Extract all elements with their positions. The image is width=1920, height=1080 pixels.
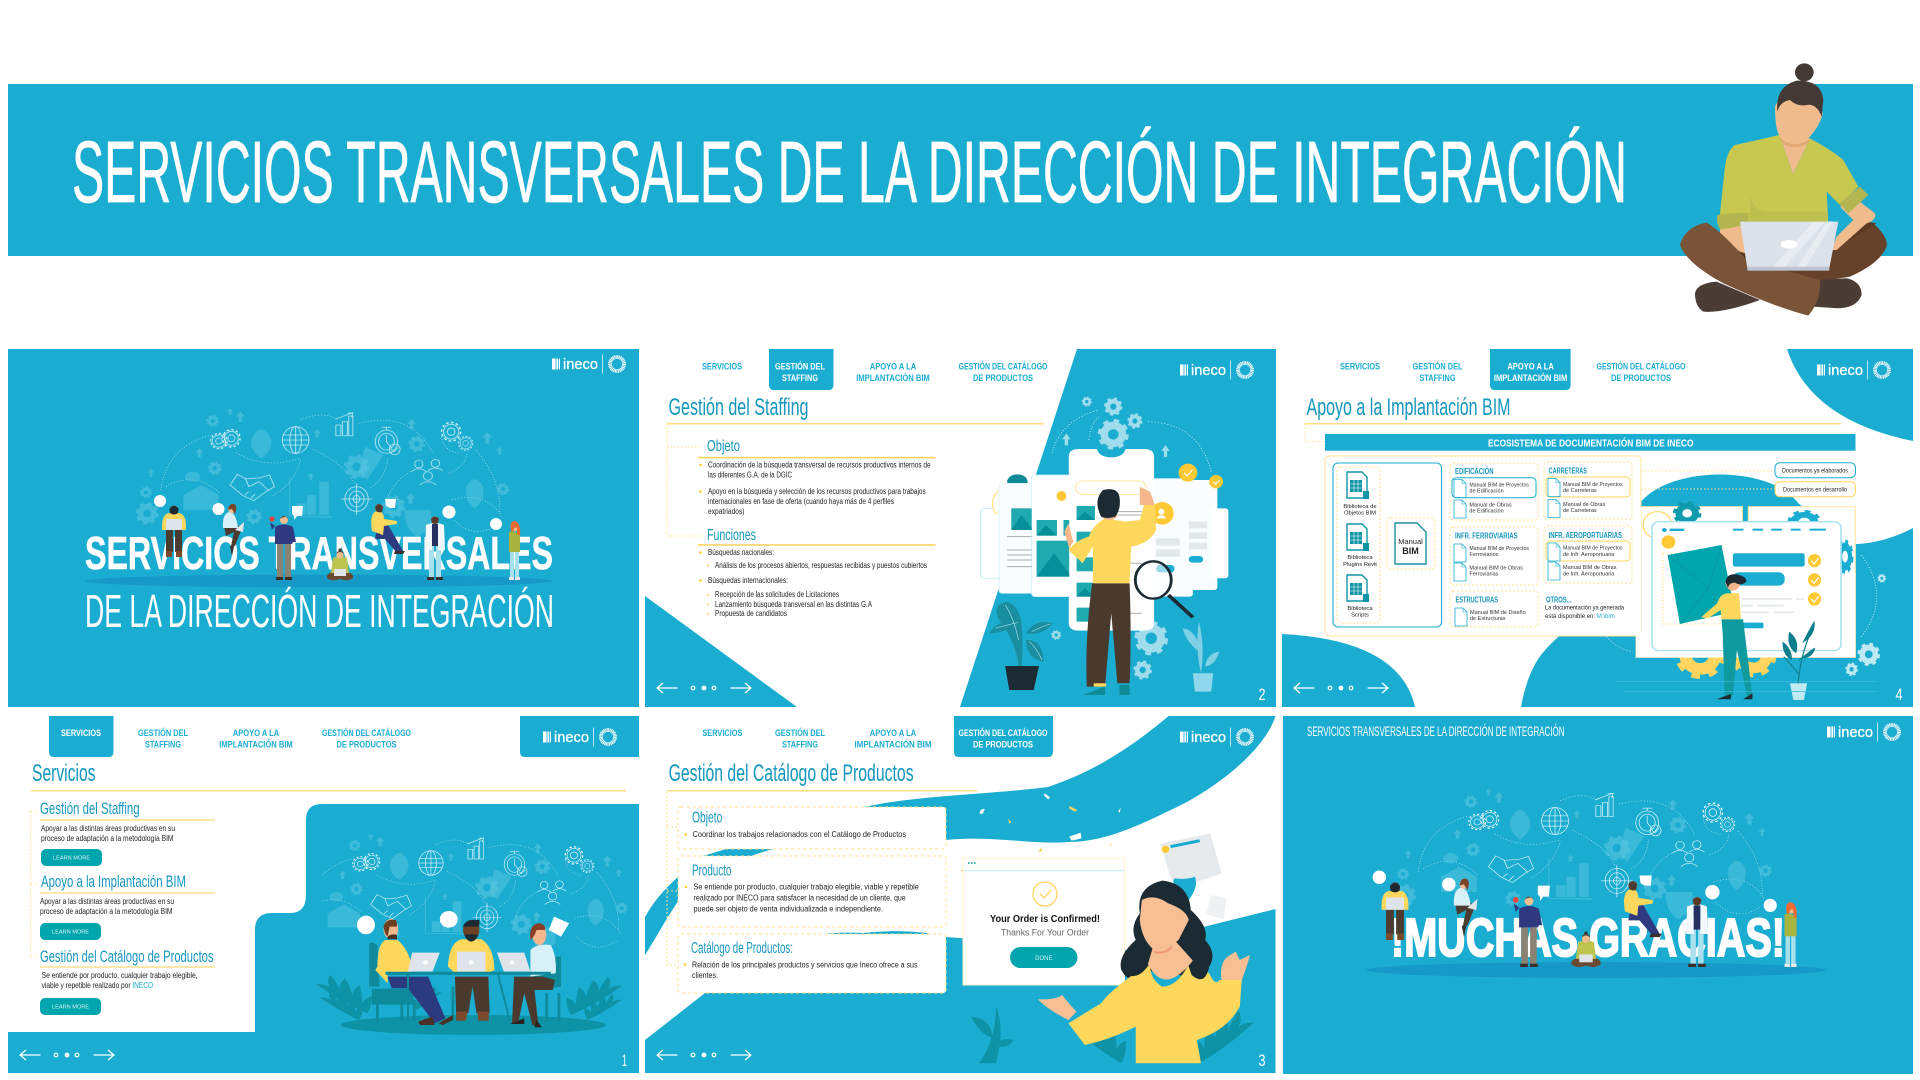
order window: Your Order is Confirmed! xyxy=(990,914,1100,925)
bottom-left triangle xyxy=(645,596,797,707)
library box: Objetos BIM xyxy=(1344,511,1376,517)
service: staffing xyxy=(40,799,215,866)
page number: 3 xyxy=(1258,1051,1266,1070)
service: catálogo: LEARN MORE xyxy=(52,1004,89,1010)
card: objeto: Coordinar los trabajos relacionados con el Catálogo de Productos xyxy=(693,829,906,839)
card: producto: Producto xyxy=(692,863,731,880)
card: catálogo: Relación de los principales productos y servicios que Ineco ofrece a sus xyxy=(692,959,918,969)
service: catálogo: viable y repetible realizado por INECO xyxy=(42,981,153,990)
section: funciones: Búsquedas nacionales: xyxy=(708,548,774,557)
library box: Manual xyxy=(1398,537,1423,546)
yellow container: INFR. AEROPORTUARIAS xyxy=(1549,531,1622,540)
navigation: SERVICIOS xyxy=(1340,362,1380,372)
yellow container: Manual BIM de Obras xyxy=(1563,565,1617,571)
header banner xyxy=(8,84,1913,256)
slide: gestión del catálogo de productos xyxy=(645,716,1276,1074)
yellow container: Manual BIM de Obras xyxy=(1469,566,1523,572)
active tab xyxy=(954,716,1053,757)
library box: Scripts xyxy=(1351,612,1369,618)
yellow container: de Infr. Aeroportuaria xyxy=(1563,572,1615,578)
yellow container: de Estructuras xyxy=(1470,616,1506,622)
order window: Thanks For Your Order xyxy=(1001,928,1089,938)
slide arrows xyxy=(657,1050,751,1060)
heading: Gestión del Staffing xyxy=(668,394,808,421)
yellow container: Ferroviarias xyxy=(1469,572,1499,578)
people xyxy=(1373,871,1797,967)
illustration: woman xyxy=(971,833,1254,1063)
slide: servicios xyxy=(8,716,639,1074)
slide: portada xyxy=(8,349,639,707)
order window: DONE xyxy=(1035,956,1052,962)
illustration: person with laptop xyxy=(1680,63,1887,316)
library box: Biblioteca xyxy=(1347,555,1373,561)
section: objeto: expatriados) xyxy=(708,507,745,516)
service: staffing: proceso de adaptación a la metodología BIM xyxy=(41,834,174,843)
service: BIM: Apoyar a las distintas áreas productivas en su xyxy=(40,897,174,906)
section: funciones: Funciones xyxy=(707,527,756,544)
legend: Documentos ya elaborados xyxy=(1782,468,1848,474)
right blue shape xyxy=(960,349,1276,707)
navigation: IMPLANTACIÓN BIM xyxy=(856,372,930,383)
navigation: STAFFING xyxy=(782,373,818,383)
section: objeto: Coordinación de la búsqueda transversal de recursos productivos internos de xyxy=(708,461,931,470)
heading: Apoyo a la Implantación BIM xyxy=(1306,394,1510,421)
decorative blue shapes xyxy=(1282,349,1913,707)
logo: ineco xyxy=(1838,724,1873,741)
yellow container: INFR. FERROVIARIAS xyxy=(1455,532,1518,541)
navigation: APOYO A LA xyxy=(870,362,917,372)
bottom band and panel xyxy=(8,804,639,1073)
section: funciones: Lanzamiento búsqueda transversal en las distintas G.A xyxy=(715,600,873,609)
yellow container: Manual BIM de Proyectos xyxy=(1469,546,1529,552)
yellow container: Manual de Obras xyxy=(1469,502,1512,508)
logo xyxy=(1817,360,1889,380)
yellow container: Manual BIM de Proyectos xyxy=(1469,482,1529,488)
navigation: STAFFING xyxy=(782,740,818,750)
navigation: GESTIÓN DEL xyxy=(1412,360,1463,372)
navigation: GESTIÓN DEL xyxy=(775,360,825,372)
yellow container: Manual de Obras xyxy=(1563,502,1605,508)
yellow container: Manual BIM de Proyectos xyxy=(1563,482,1623,488)
yellow container: CARRETERAS xyxy=(1549,467,1587,476)
navigation xyxy=(1340,360,1686,383)
section: objeto xyxy=(698,438,936,516)
service: BIM: LEARN MORE xyxy=(52,930,89,936)
card: catálogo: Catálogo de Productos: xyxy=(691,940,793,957)
service: staffing: Apoyar a las distintas áreas productivas en su xyxy=(41,824,175,833)
yellow container: Manual BIM de Diseño xyxy=(1470,610,1526,616)
logo: ineco xyxy=(554,729,589,746)
logo: ineco xyxy=(1191,362,1226,379)
section: objeto: Objeto xyxy=(707,438,740,455)
navigation: DE PRODUCTOS xyxy=(973,373,1033,383)
yellow container: ESTRUCTURAS xyxy=(1456,596,1498,605)
yellow container: OTROS... xyxy=(1546,596,1571,605)
card: objeto: Objeto xyxy=(692,810,722,827)
service: staffing: LEARN MORE xyxy=(53,856,90,862)
navigation: APOYO A LA xyxy=(1507,362,1554,372)
legend: Documentos en desarrollo xyxy=(1783,488,1848,494)
navigation: IMPLANTACIÓN BIM xyxy=(219,738,293,750)
navigation: DE PRODUCTOS xyxy=(973,740,1033,750)
navigation: GESTIÓN DEL xyxy=(775,727,825,738)
section: objeto: las diferentes G.A. de la DGIC xyxy=(708,471,792,480)
library box: BIM xyxy=(1402,546,1419,556)
small title: SERVICIOS TRANSVERSALES DE LA DIRECCIÓN DE INTEGRACIÓN xyxy=(1307,723,1564,739)
section: funciones: Búsquedas internacionales: xyxy=(708,576,788,585)
yellow container: La documentación ya generada xyxy=(1545,606,1625,612)
section: objeto: Apoyo en la búsqueda y selección de los recursos productivos para trabajos xyxy=(708,487,926,496)
section: funciones: Análisis de los procesos abiertos, respuestas recibidas y puestos cubiertos xyxy=(715,561,927,570)
dotted legend connectors xyxy=(1641,471,1775,489)
navigation: GESTIÓN DEL CATÁLOGO xyxy=(958,360,1048,372)
service: staffing: Gestión del Staffing xyxy=(40,799,140,818)
slide arrows xyxy=(1294,683,1388,693)
yellow container: de Carreteras xyxy=(1563,488,1597,494)
navigation: SERVICIOS xyxy=(61,728,101,738)
yellow container xyxy=(1325,456,1641,636)
yellow container: está disponible en: M:\bim xyxy=(1545,614,1615,620)
yellow container: EDIFICACIÓN xyxy=(1455,467,1494,476)
yellow container: Ferroviarios xyxy=(1469,552,1499,558)
card: objeto xyxy=(678,807,946,849)
legend xyxy=(1775,463,1856,497)
navigation: STAFFING xyxy=(145,740,181,750)
service: BIM: Apoyo a la Implantación BIM xyxy=(41,872,186,891)
navigation: GESTIÓN DEL xyxy=(138,727,188,738)
card: producto: Se entiende por producto, cualquier trabajo elegible, viable y repetible xyxy=(694,882,919,892)
card: producto: realizado por INECO para satisfacer la necesidad de un cliente, que xyxy=(694,893,906,903)
slide arrows xyxy=(657,683,751,693)
logo xyxy=(1180,728,1252,746)
service: BIM xyxy=(40,872,215,940)
slide: gestión del staffing xyxy=(645,349,1276,707)
banner: ECOSISTEMA DE DOCUMENTACIÓN BIM DE INECO xyxy=(1488,436,1694,450)
navigation: IMPLANTACIÓN BIM xyxy=(854,738,932,750)
service: catálogo: Gestión del Catálogo de Productos xyxy=(40,947,214,966)
logo xyxy=(543,728,615,746)
logo: ineco xyxy=(563,356,598,373)
navigation: GESTIÓN DEL CATÁLOGO xyxy=(1596,360,1686,372)
active tab xyxy=(769,349,834,390)
active tab xyxy=(1490,349,1571,390)
logo xyxy=(552,354,624,374)
page number: 4 xyxy=(1896,685,1902,704)
slide arrows xyxy=(20,1050,114,1060)
logo: ineco xyxy=(1191,729,1226,746)
service: catálogo: Se entiende por producto, cualquier trabajo elegible, xyxy=(42,971,198,980)
service: catálogo xyxy=(40,947,215,1015)
navigation: APOYO A LA xyxy=(870,728,917,738)
section: funciones xyxy=(698,527,936,618)
cover title: DE LA DIRECCIÓN DE INTEGRACIÓN xyxy=(85,585,554,637)
people xyxy=(154,495,520,580)
document groups xyxy=(1450,462,1632,627)
navigation: IMPLANTACIÓN BIM xyxy=(1494,372,1567,383)
slide: apoyo a la implantación BIM xyxy=(1282,349,1913,707)
yellow container: de Edificación xyxy=(1469,508,1504,514)
banner xyxy=(1325,434,1856,451)
section: objeto: internacionales en fase de oferta (cuando haya más de 4 perfiles xyxy=(708,497,894,506)
service: BIM: proceso de adaptación a la metodología BIM xyxy=(40,907,173,916)
logo xyxy=(1827,722,1899,742)
logo xyxy=(1180,360,1252,380)
library box xyxy=(1333,463,1442,627)
heading: Servicios xyxy=(32,760,96,787)
navigation: SERVICIOS xyxy=(702,728,742,738)
navigation: SERVICIOS xyxy=(702,362,742,372)
card: catálogo xyxy=(678,934,946,993)
active tab xyxy=(49,716,114,757)
illustration: team at table xyxy=(316,911,623,1035)
logo: ineco xyxy=(1828,362,1863,379)
cover title: SERVICIOS TRANSVERSALES xyxy=(85,527,553,579)
page number: 2 xyxy=(1258,685,1266,704)
yellow container: de Edificación xyxy=(1469,488,1504,494)
section: funciones: Propuesta de candidatos xyxy=(715,609,787,618)
navigation xyxy=(61,727,411,750)
blue swoosh shapes xyxy=(645,716,1276,1073)
navigation xyxy=(702,360,1048,383)
slide: muchas gracias xyxy=(1283,716,1913,1074)
card: producto xyxy=(678,856,946,927)
navigation: DE PRODUCTOS xyxy=(1611,373,1671,383)
shadow ellipse xyxy=(1366,962,1826,978)
navigation: GESTIÓN DEL CATÁLOGO xyxy=(958,727,1048,738)
library box: Biblioteca de xyxy=(1343,504,1377,510)
section: funciones: Recepción de las solicitudes de Licitaciones xyxy=(715,590,839,599)
confetti xyxy=(960,793,1121,901)
yellow container: Manual BIM de Proyectos xyxy=(1563,546,1623,552)
navigation: STAFFING xyxy=(1420,373,1456,383)
navigation: APOYO A LA xyxy=(233,728,280,738)
navigation xyxy=(702,727,1048,750)
card: catálogo: clientes. xyxy=(692,970,718,980)
navigation: DE PRODUCTOS xyxy=(336,740,396,750)
illustration: woman with large screen xyxy=(1606,503,1885,700)
heading: Gestión del Catálogo de Productos xyxy=(669,760,914,787)
card: producto: puede ser objeto de venta individualizada e independiente. xyxy=(694,903,883,913)
thanks heading: !MUCHAS GRACIAS! xyxy=(1391,908,1785,968)
navigation: GESTIÓN DEL CATÁLOGO xyxy=(322,727,411,738)
library box: Plugins Revit xyxy=(1343,562,1377,568)
shadow ellipse xyxy=(85,574,553,588)
cover title xyxy=(85,527,554,637)
order window xyxy=(963,858,1124,985)
yellow container: de Carreteras xyxy=(1563,508,1597,514)
icon cloud xyxy=(285,834,627,952)
logo panel xyxy=(520,716,639,757)
illustration: man with app screens xyxy=(981,397,1228,695)
icon cloud xyxy=(137,408,509,537)
yellow container: de Infr. Aeroportuaria xyxy=(1563,552,1615,558)
page number: 1 xyxy=(622,1051,627,1070)
library box: Biblioteca xyxy=(1347,606,1373,612)
icon cloud xyxy=(1394,789,1771,919)
